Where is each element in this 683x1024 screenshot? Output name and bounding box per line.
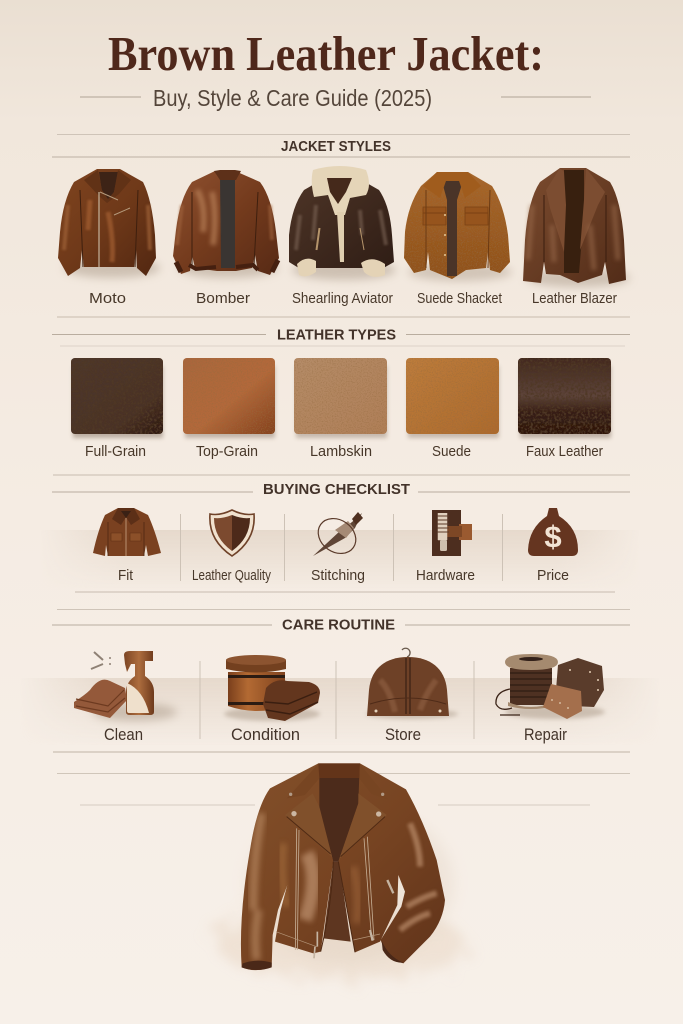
icon: fit jacket: [93, 508, 161, 556]
label: repair: Repair: [524, 726, 567, 744]
icon: clean spray bottle and cloth: [74, 651, 177, 721]
panel: jacket styles: [52, 134, 630, 317]
icon: condition jar and cloth: [224, 655, 320, 721]
jacket: leather blazer: [523, 168, 630, 287]
swatch: lambskin: [294, 358, 387, 438]
icon: hardware zipper: [432, 510, 472, 556]
jacket: suede shacket: [404, 172, 512, 281]
swatch: top-grain: [183, 358, 275, 438]
subtitle: Buy, Style & Care Guide (2025): [153, 85, 432, 111]
icon: repair spool and patches: [496, 654, 605, 719]
icon: store garment bag: [366, 648, 458, 719]
heading: leather types: LEATHER TYPES: [277, 328, 396, 344]
heading: jacket styles: JACKET STYLES: [281, 139, 391, 155]
label: leather quality: Leather Quality: [192, 567, 271, 584]
label: hardware: Hardware: [416, 567, 475, 584]
label: store: Store: [385, 726, 421, 744]
label: top-grain: Top-Grain: [196, 443, 258, 460]
swatch: faux leather: [518, 358, 611, 438]
icon: price money bag: [528, 508, 578, 556]
panel: care routine: [20, 618, 660, 752]
heading: care routine: CARE ROUTINE: [282, 618, 395, 634]
title block: [80, 26, 591, 111]
label: leather blazer: Leather Blazer: [532, 290, 617, 307]
label: shearling aviator: Shearling Aviator: [292, 290, 393, 307]
hero image: brown leather jacket: [213, 763, 467, 980]
label: lambskin: Lambskin: [310, 443, 372, 460]
icon: stitching needle: [311, 511, 363, 561]
label: full-grain: Full-Grain: [85, 443, 146, 460]
swatch: suede: [406, 358, 499, 438]
label: faux leather: Faux Leather: [526, 443, 603, 460]
swatch: full-grain: [71, 358, 163, 438]
label: price: Price: [537, 567, 569, 584]
panel: buying checklist: [40, 482, 640, 610]
label: stitching: Stitching: [311, 567, 365, 584]
label: moto: Moto: [89, 290, 126, 307]
dollar sign: $: [544, 519, 562, 554]
label: clean: Clean: [104, 726, 143, 744]
label: bomber: Bomber: [196, 290, 250, 307]
label: suede: Suede: [432, 443, 471, 460]
jacket: moto: [58, 169, 160, 278]
jacket: shearling aviator: [289, 166, 396, 280]
heading: buying checklist: BUYING CHECKLIST: [263, 482, 410, 498]
label: fit: Fit: [118, 567, 134, 584]
icon: leather quality shield: [210, 510, 254, 556]
label: suede shacket: Suede Shacket: [417, 290, 503, 307]
label: condition: Condition: [231, 726, 300, 744]
jacket: bomber: [173, 170, 279, 278]
title: Brown Leather Jacket:: [108, 26, 544, 81]
panel: leather types: [52, 328, 630, 475]
